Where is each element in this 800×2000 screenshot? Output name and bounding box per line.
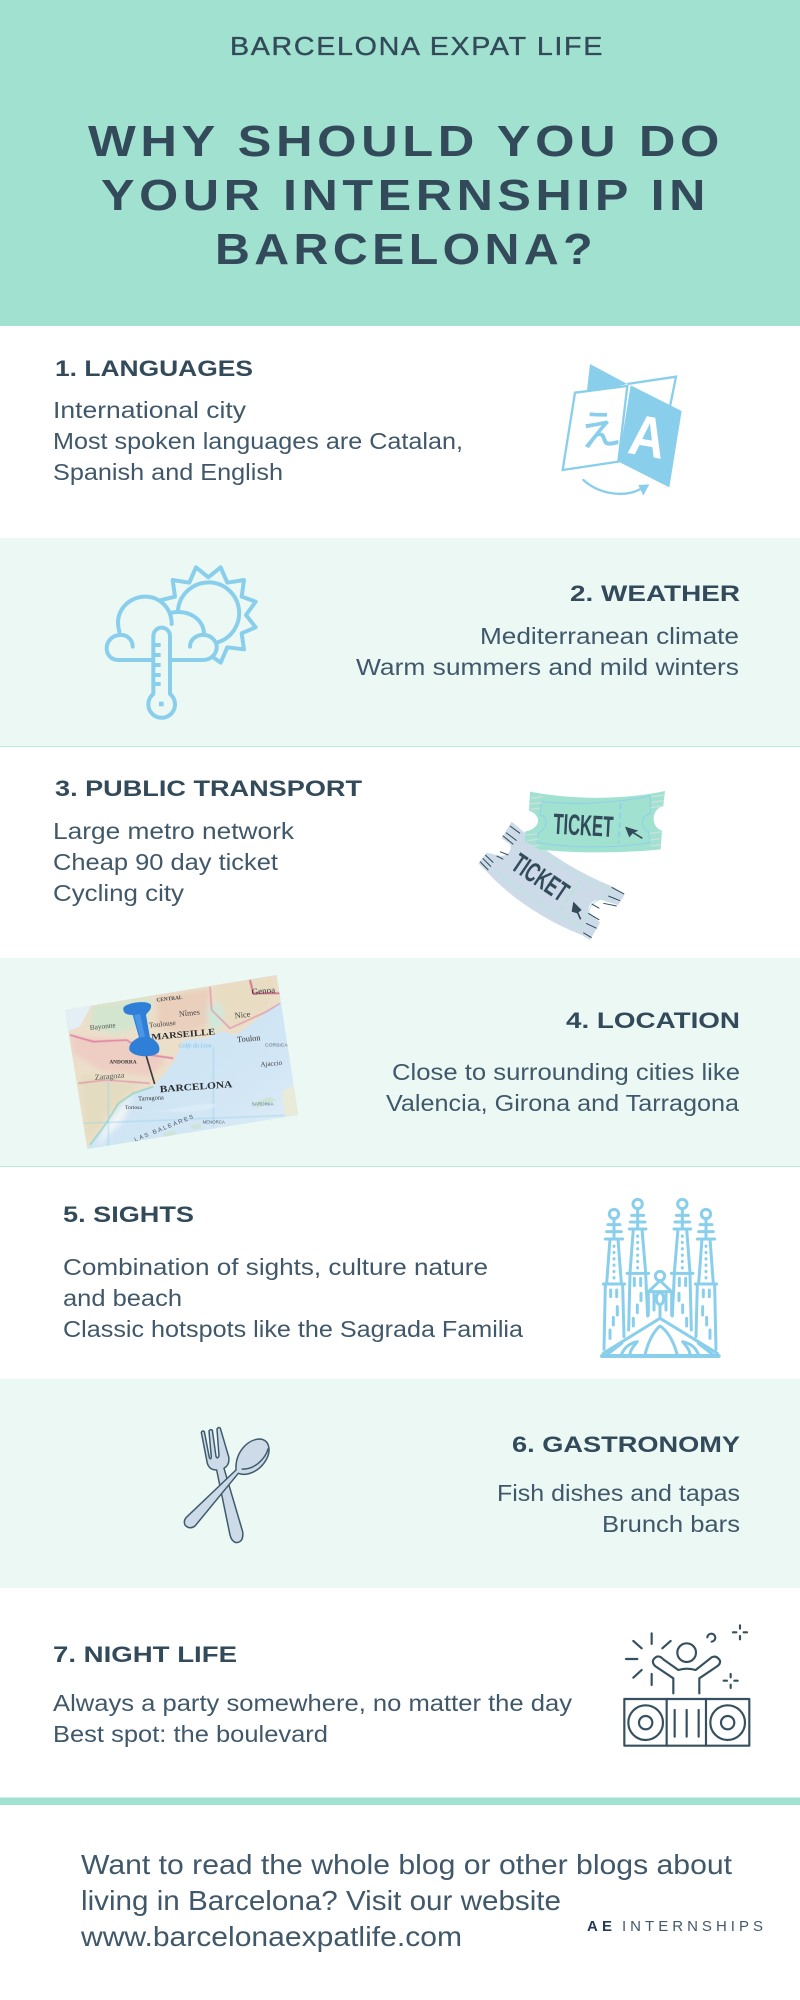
map labels: BARCELONA [159, 1079, 233, 1095]
heading: night life: 7. NIGHT LIFE [53, 1642, 237, 1667]
map labels: Tortosa [125, 1105, 142, 1111]
map labels: Toulouse [149, 1018, 176, 1030]
map labels: SARDINIA [252, 1102, 275, 1107]
text: public transport [53, 818, 295, 906]
heading: public transport: 3. PUBLIC TRANSPORT [55, 776, 363, 801]
text: gastronomy: Fish dishes and tapas [497, 1480, 740, 1506]
title: BARCELONA? [215, 225, 597, 274]
panel: sights [0, 1167, 800, 1379]
map labels: LAS BALEARES [134, 1114, 196, 1144]
text: weather: Mediterranean climate [480, 623, 739, 649]
panel: night life [0, 1588, 800, 1797]
panel: gastronomy [0, 1379, 800, 1588]
heading: location: 4. LOCATION [566, 1008, 740, 1033]
map labels: ANDORRA [109, 1059, 137, 1065]
image: map with blue pin [60, 970, 303, 1153]
panel: languages [0, 326, 800, 538]
panel: location [0, 958, 800, 1168]
blue ticket [478, 822, 625, 940]
text: location: Close to surrounding cities like [392, 1059, 740, 1085]
map labels [89, 985, 288, 1144]
call to action text: Want to read the whole blog or other blogs about [81, 1849, 732, 1880]
heading: gastronomy: 6. GASTRONOMY [512, 1432, 740, 1457]
text: location [386, 1059, 740, 1116]
map labels: CENTRAL [156, 995, 183, 1004]
text: sights [63, 1254, 523, 1342]
map labels: Toulon [237, 1033, 262, 1044]
text: public transport: Cycling city [53, 880, 185, 906]
map labels: Nîmes [179, 1008, 200, 1019]
green ticket [525, 791, 665, 852]
call to action text: www.barcelonaexpatlife.com [80, 1921, 462, 1952]
map labels: CORSICA [265, 1043, 288, 1049]
text: languages: International city [53, 397, 247, 423]
text: languages: Spanish and English [53, 459, 283, 485]
map labels: Nice [234, 1010, 251, 1020]
heading: languages: 1. LANGUAGES [55, 356, 253, 381]
title: YOUR INTERNSHIP IN [101, 171, 710, 220]
map labels: MENORCA [203, 1119, 225, 1124]
text: gastronomy [497, 1480, 740, 1537]
logo: AE Internships: INTERNSHIPS [622, 1918, 763, 1935]
text: location: Valencia, Girona and Tarragona [386, 1090, 739, 1116]
central gable and roof [602, 1271, 719, 1356]
text: weather [356, 623, 739, 680]
icon: translation book: え [577, 405, 623, 456]
heading: sights: 5. SIGHTS [63, 1202, 194, 1227]
divider bar [0, 1798, 800, 1805]
panel: footer [0, 1805, 800, 2000]
icon: translation book: A [624, 402, 671, 472]
logo: AE Internships: AE [587, 1918, 612, 1935]
site name: BARCELONA EXPAT LIFE [230, 31, 604, 61]
panel: public transport [0, 747, 800, 958]
green ticket: TICKET [552, 808, 614, 844]
panel: weather [0, 538, 800, 748]
map labels: MARSEILLE [151, 1026, 216, 1042]
text: night life: Best spot: the boulevard [53, 1721, 328, 1747]
panel: header [0, 0, 800, 326]
map labels: Bayonne [89, 1020, 116, 1032]
text: night life [53, 1690, 573, 1747]
pin [123, 1002, 159, 1084]
map labels: Golfe du Lion [178, 1042, 212, 1049]
text: gastronomy: Brunch bars [602, 1511, 740, 1537]
call to action text: living in Barcelona? Visit our website [81, 1885, 561, 1916]
text: sights: Combination of sights, culture nature [63, 1254, 488, 1280]
icon: fork and spoon [184, 1427, 269, 1543]
text: weather: Warm summers and mild winters [356, 654, 739, 680]
title [88, 117, 724, 274]
text: night life: Always a party somewhere, no matter the day [53, 1690, 573, 1716]
text: sights: Classic hotspots like the Sagrada Familia [63, 1316, 523, 1342]
right towers [671, 1199, 717, 1349]
map labels: Ajaccio [260, 1059, 283, 1069]
icon: tickets [478, 791, 665, 940]
left towers [603, 1199, 649, 1349]
text: sights: and beach [63, 1285, 182, 1311]
icon: translation book [563, 364, 682, 496]
icon: Sagrada Familia [602, 1199, 719, 1356]
map labels: Genoa [251, 985, 276, 997]
icon: sun cloud thermometer [107, 567, 256, 718]
text: languages [53, 397, 463, 485]
text: public transport: Large metro network [53, 818, 295, 844]
map labels: Zaragoza [94, 1070, 125, 1082]
icon: DJ at turntables [624, 1625, 749, 1746]
text: public transport: Cheap 90 day ticket [53, 849, 279, 875]
blue ticket: TICKET [506, 847, 575, 908]
call to action text [80, 1849, 732, 1952]
text: languages: Most spoken languages are Catalan, [53, 428, 463, 454]
heading: weather: 2. WEATHER [570, 581, 740, 606]
map labels: Tarragona [138, 1094, 164, 1103]
title: WHY SHOULD YOU DO [88, 117, 724, 166]
